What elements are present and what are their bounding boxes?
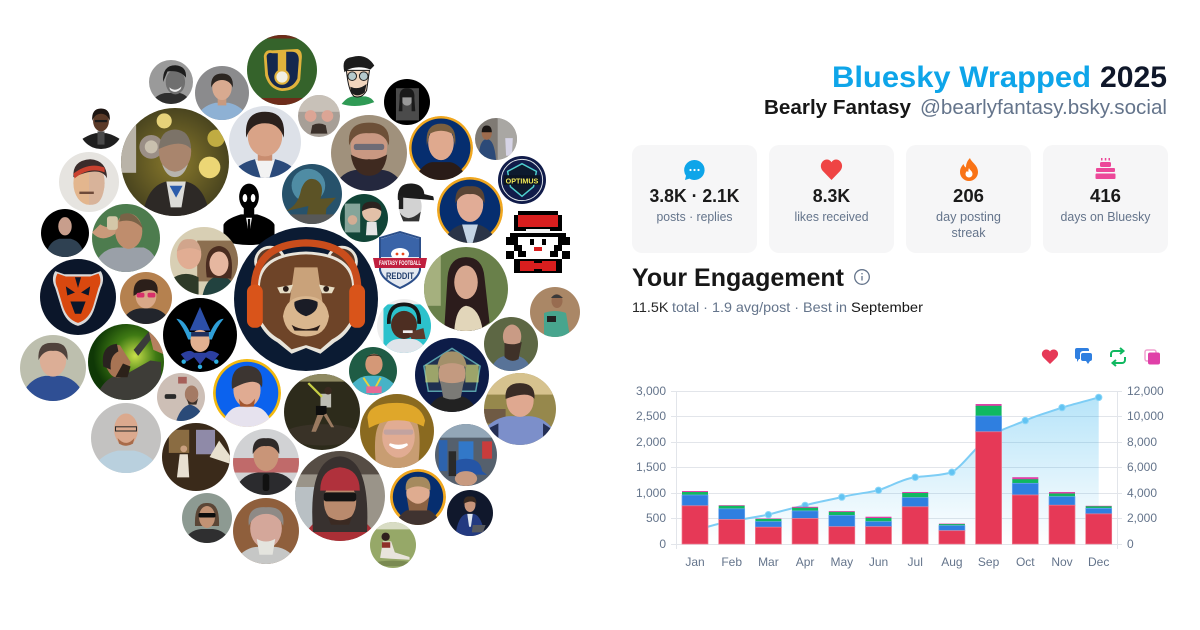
left axis labels: 1,000 bbox=[636, 486, 666, 500]
icon: heart bbox=[821, 160, 842, 180]
avatar: man on navy with gold ring 3 bbox=[390, 469, 446, 525]
avatar: older man with white goatee bbox=[233, 498, 299, 564]
panel: days on Bluesky bbox=[1043, 145, 1168, 253]
left axis labels bbox=[636, 384, 666, 551]
profile name and handle: @bearlyfantasy.bsky.social bbox=[920, 97, 1167, 119]
avatar: podcaster with microphone bbox=[157, 373, 205, 421]
avatar: man with camera bbox=[530, 287, 580, 337]
right axis labels: 8,000 bbox=[1127, 435, 1157, 449]
avatar: man in red hood and sunglasses bbox=[295, 451, 385, 541]
panel: day posting streak bbox=[906, 145, 1031, 253]
avatar: studio host in navy suit bbox=[447, 490, 493, 536]
avatar: bearded man in profile bbox=[484, 317, 538, 371]
right axis labels bbox=[1127, 384, 1164, 551]
avatar: smiling man in blue shirt bbox=[20, 335, 86, 401]
avatar: man drinking on green burst bbox=[88, 324, 164, 400]
avatar: black and white man in cap bbox=[398, 183, 435, 221]
panel: days on Bluesky: days on Bluesky bbox=[1060, 209, 1151, 224]
stacked bars: quotes bbox=[682, 404, 1112, 525]
avatar: bald man with glasses bbox=[91, 403, 161, 473]
avatar: man in backward cap with team logo bbox=[415, 338, 489, 412]
panel: days on Bluesky: 416 bbox=[1090, 186, 1121, 206]
avatar: silhouette with glowing eyes bbox=[223, 184, 275, 245]
avatar: pixel art character bbox=[506, 211, 570, 273]
avatar: couple bbox=[170, 227, 238, 295]
avatar: fantasy creature bbox=[282, 164, 342, 224]
engagement summary: September bbox=[851, 299, 923, 315]
avatar: Optimus badge: OPTIMUS bbox=[506, 176, 538, 185]
avatar: player sitting on grass bbox=[370, 522, 416, 568]
avatar: Optimus badge bbox=[498, 156, 546, 204]
avatar: man with pink sunglasses bbox=[120, 272, 172, 324]
avatar: Brewers logo bbox=[247, 35, 317, 106]
right axis labels: 6,000 bbox=[1127, 460, 1157, 474]
icon: birthday cake bbox=[1096, 158, 1116, 179]
profile name and handle: Bearly Fantasy bbox=[764, 97, 912, 119]
panel: posts and replies: 3.8K · 2.1K bbox=[650, 186, 740, 206]
panel: day posting streak: streak bbox=[952, 225, 986, 240]
month labels: Jan bbox=[685, 555, 705, 569]
chart: monthly engagement bbox=[636, 384, 1164, 569]
right axis labels: 0 bbox=[1127, 537, 1134, 551]
avatar: grayscale woman on black bbox=[384, 79, 430, 125]
icon: legend quotes bbox=[1145, 350, 1160, 364]
profile name and handle bbox=[764, 97, 1167, 119]
avatar: news anchor bbox=[229, 106, 301, 178]
avatar: softball batter at dusk bbox=[284, 374, 360, 450]
panel: posts and replies bbox=[632, 145, 757, 253]
month labels: Sep bbox=[978, 555, 1000, 569]
avatar: woman in yellow hat bbox=[360, 394, 434, 468]
icon: chat bubble bbox=[684, 160, 705, 180]
avatar: Fantasy Football Reddit shield: REDDIT bbox=[386, 271, 414, 281]
icon: legend reposts bbox=[1111, 348, 1125, 366]
engagement summary: total · 1.9 avg/post · Best in bbox=[672, 299, 847, 315]
stacked bars: replies bbox=[682, 416, 1112, 531]
avatar: Chicago Bears logo bbox=[40, 259, 116, 335]
stacked bars: likes bbox=[682, 432, 1112, 544]
right axis labels: 10,000 bbox=[1127, 409, 1164, 423]
right axis labels: 4,000 bbox=[1127, 486, 1157, 500]
panel: posts and replies: posts · replies bbox=[656, 209, 733, 224]
panel: likes received: likes received bbox=[794, 209, 868, 224]
icon: info bbox=[855, 270, 869, 284]
month labels: May bbox=[830, 555, 853, 569]
left axis labels: 0 bbox=[659, 537, 666, 551]
avatar: man beside poster bbox=[475, 118, 517, 160]
heading: your engagement: Your Engagement bbox=[632, 264, 845, 292]
avatar: cartoon man with glasses bbox=[342, 56, 374, 106]
panel: day posting streak: 206 bbox=[953, 186, 984, 206]
avatar: Funko figures bbox=[340, 194, 388, 242]
month labels: Oct bbox=[1016, 555, 1035, 569]
avatar: man in black suit bbox=[82, 108, 120, 149]
avatar: man with microphone at stadium bbox=[233, 429, 299, 495]
avatar: masked face with goggles bbox=[298, 95, 340, 137]
month labels: Feb bbox=[721, 555, 742, 569]
avatar: two women in dark room bbox=[162, 423, 230, 491]
left axis labels: 2,000 bbox=[636, 435, 666, 449]
avatar: main bear logo with headphones bbox=[234, 227, 378, 371]
avatar: smiling man with lanyard bbox=[349, 347, 397, 395]
avatar: man with headset and microphone bbox=[377, 299, 431, 353]
title: 2025 bbox=[1100, 61, 1167, 94]
month labels: Nov bbox=[1051, 555, 1073, 569]
icon: legend heart bbox=[1042, 350, 1058, 364]
month labels: Dec bbox=[1088, 555, 1109, 569]
month labels: Aug bbox=[941, 555, 963, 569]
right axis labels: 12,000 bbox=[1127, 384, 1164, 398]
avatar: man in sunglasses outdoors bbox=[182, 493, 232, 543]
legend icons bbox=[1042, 348, 1160, 366]
avatar: man on grey background bbox=[195, 66, 249, 120]
avatar: Dodgers fans bbox=[435, 424, 497, 486]
avatar: man in blue fleece bbox=[484, 373, 556, 445]
title: Bluesky Wrapped bbox=[832, 61, 1091, 94]
left axis labels: 2,500 bbox=[636, 409, 666, 423]
avatar: man on blue with gold ring bbox=[213, 359, 281, 427]
icon: flame bbox=[960, 158, 978, 181]
engagement summary bbox=[632, 299, 923, 315]
avatar: jester bbox=[163, 298, 237, 372]
avatar: bobblehead with Christmas tree bbox=[121, 108, 229, 216]
avatar: man on navy with gold ring 2 bbox=[437, 177, 503, 243]
left axis labels: 1,500 bbox=[636, 460, 666, 474]
avatar cluster bbox=[20, 35, 580, 568]
avatar: man on navy with gold ring 1 bbox=[409, 116, 473, 180]
left axis labels: 500 bbox=[646, 511, 666, 525]
avatar: painted portrait with red headband bbox=[59, 152, 119, 212]
panel: day posting streak: day posting bbox=[936, 209, 1001, 224]
left axis labels: 3,000 bbox=[636, 384, 666, 398]
month labels: Jul bbox=[908, 555, 923, 569]
avatar: bearded man with glasses bbox=[331, 115, 407, 191]
right axis labels: 2,000 bbox=[1127, 511, 1157, 525]
panel: likes received: 8.3K bbox=[813, 186, 850, 206]
icon: legend replies bbox=[1075, 348, 1092, 364]
cumulative area and line bbox=[695, 394, 1102, 544]
stacked bars: reposts bbox=[682, 406, 1112, 526]
month labels: Apr bbox=[796, 555, 814, 569]
avatar: Fantasy Football Reddit shield: FANTASY FOOTBALL bbox=[379, 261, 421, 267]
avatar: Fantasy Football Reddit shield bbox=[373, 232, 427, 288]
month labels: Jun bbox=[869, 555, 888, 569]
panel: likes received bbox=[769, 145, 894, 253]
month labels bbox=[685, 555, 1109, 569]
avatar: man with dreads bbox=[149, 60, 193, 104]
avatar: man drinking bbox=[92, 204, 160, 272]
avatar: woman with long dark hair bbox=[424, 247, 508, 331]
avatar: man on black background bbox=[41, 209, 89, 257]
engagement summary: 11.5K bbox=[632, 299, 669, 315]
month labels: Mar bbox=[758, 555, 779, 569]
